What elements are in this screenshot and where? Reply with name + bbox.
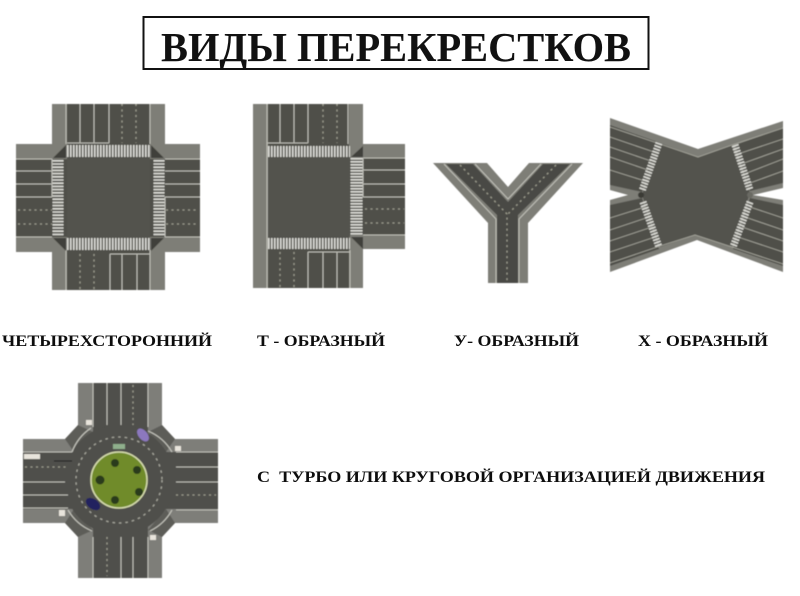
X-shaped intersection diagram <box>610 118 783 272</box>
blue car <box>84 495 102 513</box>
direction arrow <box>54 460 72 462</box>
label: roundabout: С ТУРБО ИЛИ КРУГОВОЙ ОРГАНИЗАЦИЕЙ ДВИЖЕНИЯ <box>257 469 765 486</box>
T-shaped intersection diagram <box>253 104 405 288</box>
label: X-shaped: Х - ОБРАЗНЫЙ <box>638 333 768 350</box>
title: ВИДЫ ПЕРЕКРЕСТКОВ <box>161 24 631 70</box>
Y-shaped intersection diagram <box>433 163 583 283</box>
four-way intersection diagram <box>16 104 200 290</box>
purple car <box>135 426 151 444</box>
central green island <box>91 452 147 508</box>
label: four-way: ЧЕТЫРЕХСТОРОННИЙ <box>2 333 212 350</box>
label: Y-shaped: У- ОБРАЗНЫЙ <box>454 333 579 350</box>
label: T-shaped: Т - ОБРАЗНЫЙ <box>257 333 385 350</box>
roundabout intersection diagram <box>23 383 218 578</box>
island trees <box>96 459 143 504</box>
road signs <box>24 420 181 540</box>
